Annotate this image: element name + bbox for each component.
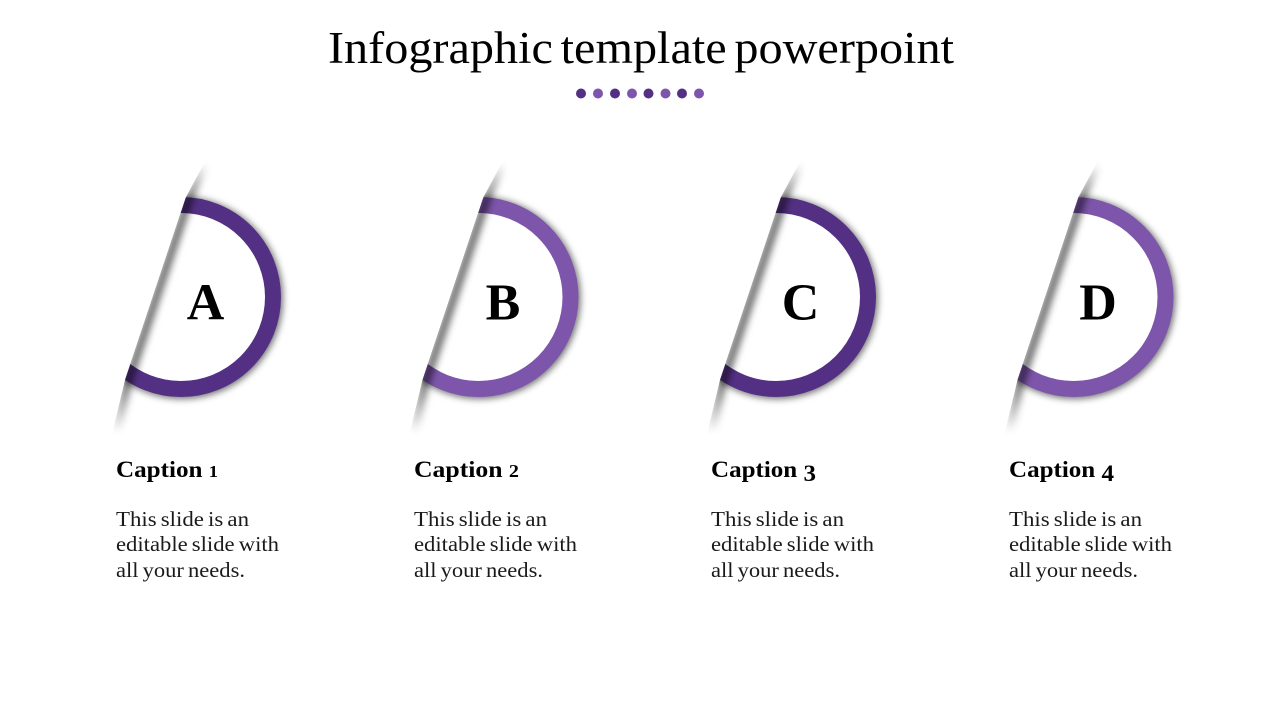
letter C: C [782, 274, 819, 332]
icon: half ring A [114, 166, 288, 429]
panel: B [412, 166, 586, 582]
caption 4 heading: 4 [1101, 461, 1115, 486]
letter D: D [1079, 274, 1117, 332]
icon: half ring B [412, 166, 586, 429]
caption 4 heading: Caption [1009, 457, 1088, 482]
caption 1 text: all your needs. [116, 558, 245, 582]
caption 3 text: editable slide with [711, 532, 874, 556]
caption 2 heading: Caption 2 [414, 457, 519, 482]
caption 3 text [711, 507, 874, 582]
icon: half ring C [709, 166, 883, 429]
dotted divider [576, 88, 704, 98]
caption 2 text: all your needs. [414, 558, 543, 582]
caption 3 heading: Caption [711, 457, 790, 482]
panel: D [1006, 166, 1180, 582]
caption 2 text: editable slide with [414, 532, 577, 556]
title: Infographic template powerpoint [328, 23, 955, 73]
caption 3 text: all your needs. [711, 558, 840, 582]
panel: C [709, 166, 883, 582]
icon: half ring D [1006, 166, 1180, 429]
caption 1 heading: Caption 1 [116, 457, 218, 482]
panel: A [114, 166, 288, 582]
caption 1 text: editable slide with [116, 532, 279, 556]
caption 2 text [414, 507, 577, 582]
caption 1 text [116, 507, 279, 582]
caption 4 text: all your needs. [1009, 558, 1138, 582]
caption 4 text [1009, 507, 1172, 582]
caption 1 text: This slide is an [116, 507, 249, 531]
caption 2 text: This slide is an [414, 507, 547, 531]
caption 4 text: This slide is an [1009, 507, 1142, 531]
caption 4 text: editable slide with [1009, 532, 1172, 556]
letter B: B [486, 274, 520, 332]
letter A: A [187, 274, 225, 332]
caption 3 text: This slide is an [711, 507, 844, 531]
caption 3 heading: 3 [803, 461, 816, 486]
